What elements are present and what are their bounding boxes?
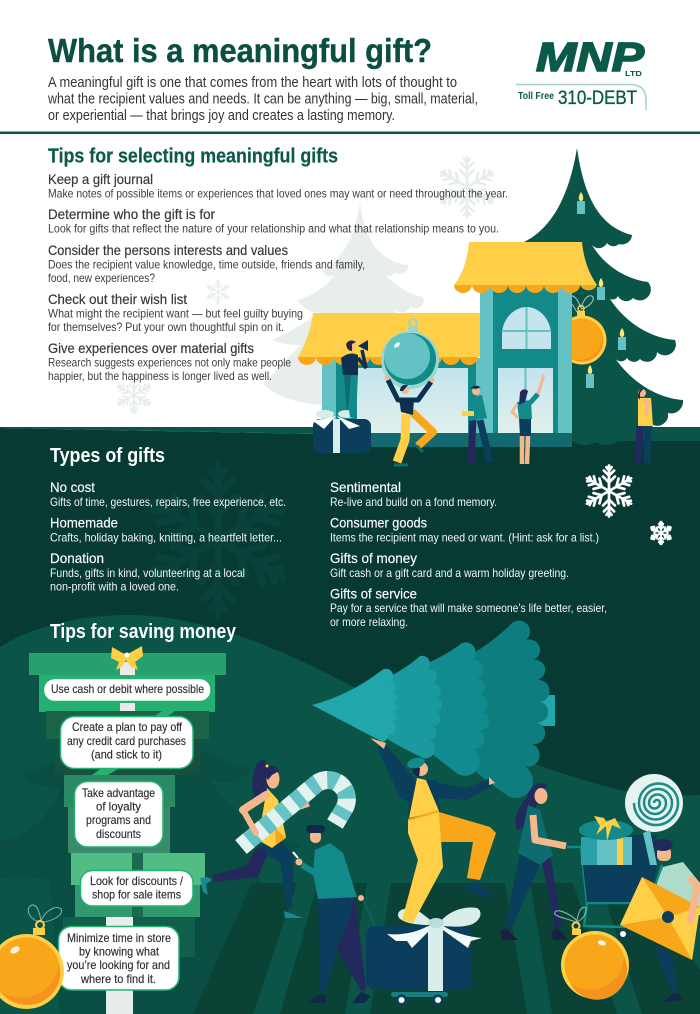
ground stripes (193, 883, 700, 1014)
type: gifts of service: or more relaxing. (330, 616, 408, 629)
shopping cart with gifts (567, 774, 683, 939)
candles (577, 192, 626, 388)
large gift on dolly (366, 908, 482, 1006)
intro paragraph: A meaningful gift is one that comes from the heart with lots of thought to (48, 75, 457, 91)
candy cane (241, 780, 347, 847)
intro paragraph (47, 75, 478, 124)
box 5: minimize time in store: you’re looking for and (67, 958, 170, 972)
man looking at phone (293, 825, 405, 1003)
tip: interests and values: Does the recipient value knowledge, time outside, friends and family, (48, 258, 365, 272)
woman pushing cart (500, 783, 568, 940)
type: donation: non-profit with a loved one. (50, 580, 179, 594)
tip: interests and values (48, 242, 365, 285)
box 5: minimize time in store: Minimize time in store (67, 931, 171, 945)
type: donation: Donation (50, 550, 104, 566)
type: consumer goods: Consumer goods (330, 514, 427, 530)
type: gifts of service: Pay for a service that will make someone’s life better, easier, (330, 602, 607, 615)
type: consumer goods: Items the recipient may need or want. (Hint: ask for a list.) (330, 532, 599, 544)
tier 4 (430, 620, 550, 798)
box 2: credit card plan: Create a plan to pay off (72, 720, 183, 734)
type: consumer goods (330, 514, 599, 544)
tier 3 (395, 642, 489, 776)
divider (0, 132, 700, 134)
shop building (298, 242, 597, 447)
type: donation: Funds, gifts in kind, volunteering at a local (50, 567, 245, 580)
man carrying box (462, 386, 490, 463)
box 3: loyalty programs: of loyalty (96, 800, 141, 814)
pale background tree (263, 202, 424, 405)
box 4: discounts and sales (71, 853, 205, 917)
tip: experiences: happier, but the happiness is longer lived as well. (48, 370, 272, 383)
man carrying envelope (620, 839, 700, 1002)
tip: wish list (48, 291, 303, 334)
pale snowflakes (116, 157, 496, 414)
person lifting ornament (384, 376, 434, 465)
right orange ornament (555, 907, 629, 1000)
ground band (0, 427, 700, 446)
tip: interests and values: Consider the persons interests and values (48, 242, 288, 258)
box 5: minimize time in store (58, 917, 195, 1014)
box 4: discounts and sales: shop for sale items (92, 888, 181, 902)
ornament held up (381, 319, 439, 389)
box 2: credit card plan: (and stick to it) (91, 748, 162, 762)
dark lower section (0, 428, 700, 1014)
MNP logo and phone number (516, 34, 646, 110)
box 1: cash or debit: Use cash or debit where possible (51, 682, 204, 696)
box 3: loyalty programs (64, 775, 175, 853)
icon: yellow bow (111, 646, 143, 670)
base (320, 433, 572, 447)
big christmas tree (500, 148, 683, 445)
box 2: credit card plan (46, 711, 209, 775)
section heading: tips for saving money: Tips for saving money (50, 621, 237, 643)
MNP logo and phone number: Toll Free (518, 90, 554, 102)
box 2: credit card plan: any credit card purchases (67, 734, 186, 748)
left orange ornament (0, 905, 64, 1009)
tip: interests and values: food, new experiences? (48, 272, 155, 285)
icon: envelope (620, 877, 700, 960)
heading: types of gifts: Types of gifts (50, 445, 165, 467)
type: homemade: Crafts, holiday baking, knitting, a heartfelt letter... (50, 532, 282, 544)
type: no cost (50, 479, 286, 509)
faint dark snowflake (144, 465, 292, 615)
heading: tips for selecting: Tips for selecting meaningful gifts (48, 146, 338, 168)
type: no cost: No cost (50, 479, 95, 495)
intro paragraph: what the recipient values and needs. It can be anything — big, small, material, (47, 92, 478, 108)
box 5: minimize time in store: by knowing what (79, 944, 160, 958)
spiral lollipop (625, 774, 683, 832)
gift signpost stack (29, 646, 226, 1014)
box 3: loyalty programs: Take advantage (82, 786, 155, 800)
tips for selecting meaningful gifts (48, 146, 508, 383)
types of gifts (50, 445, 607, 629)
box 3: loyalty programs: programs and (86, 813, 151, 827)
tower (480, 285, 572, 435)
title: What is a meaningful gift? (48, 32, 432, 69)
type: gifts of money: Gifts of money (330, 550, 417, 566)
tip: who the gift is for: Look for gifts that reflect the nature of your relationship and what that relationship means to you. (48, 222, 499, 236)
lower hill background (0, 615, 700, 1014)
box 5: minimize time in store: where to find it. (80, 972, 156, 986)
type: gifts of money: Gift cash or a gift card and a warm holiday greeting. (330, 567, 569, 580)
person with megaphone (341, 340, 368, 417)
trunk (536, 695, 555, 726)
type: homemade: Homemade (50, 514, 118, 530)
type: donation (50, 550, 245, 594)
type: sentimental: Re-live and build on a fond memory. (330, 496, 497, 509)
tier 2 (360, 656, 442, 758)
lower shop wall (322, 358, 480, 434)
box 3: loyalty programs: discounts (96, 827, 141, 841)
small awning (298, 313, 480, 365)
tip: who the gift is for (48, 206, 499, 236)
intro paragraph: or experiential — that brings joy and creates a lasting memory. (48, 108, 395, 124)
type: homemade (50, 514, 282, 544)
man in overalls lifting tree (370, 738, 496, 923)
woman waving (512, 375, 544, 464)
type: gifts of service (330, 586, 607, 629)
MNP logo and phone number: MNP (536, 34, 645, 80)
MNP logo and phone number: LTD (625, 69, 643, 78)
tip: who the gift is for: Determine who the gift is for (48, 206, 215, 222)
type: gifts of money (330, 550, 569, 580)
tip: gift journal: Make notes of possible items or experiences that loved ones may want or need throughout the year. (48, 188, 508, 200)
woman at right with cup (638, 388, 653, 463)
tip: gift journal: Keep a gift journal (48, 171, 153, 187)
small gift on ground (313, 410, 371, 453)
tip: wish list: Check out their wish list (48, 291, 187, 307)
tip: experiences (48, 340, 291, 383)
type: sentimental (330, 479, 497, 509)
tip: wish list: for themselves? Put your own thoughtful spin on it. (48, 321, 284, 334)
MNP logo and phone number: 310-DEBT (558, 88, 637, 109)
type: sentimental: Sentimental (330, 479, 401, 495)
tip: experiences: Give experiences over material gifts (48, 340, 254, 356)
type: no cost: Gifts of time, gestures, repairs, free experience, etc. (50, 496, 286, 509)
tall door window (498, 368, 553, 433)
box 4: discounts and sales: Look for discounts / (90, 874, 184, 888)
woman running with candy cane (200, 760, 347, 918)
tier 1 (312, 669, 397, 742)
tip: wish list: What might the recipient want — but feel guilty buying (48, 308, 303, 320)
box 1: cash or debit (29, 646, 226, 712)
big awning (454, 242, 597, 293)
type: gifts of service: Gifts of service (330, 586, 417, 602)
ornament on big tree (558, 296, 606, 364)
white snowflakes (584, 466, 672, 544)
faint tree behind signs (0, 690, 300, 1014)
tip: experiences: Research suggests experiences not only make people (48, 356, 291, 370)
tip: gift journal (48, 171, 508, 200)
arched window (502, 307, 551, 349)
horizontal teal tree (312, 620, 555, 798)
